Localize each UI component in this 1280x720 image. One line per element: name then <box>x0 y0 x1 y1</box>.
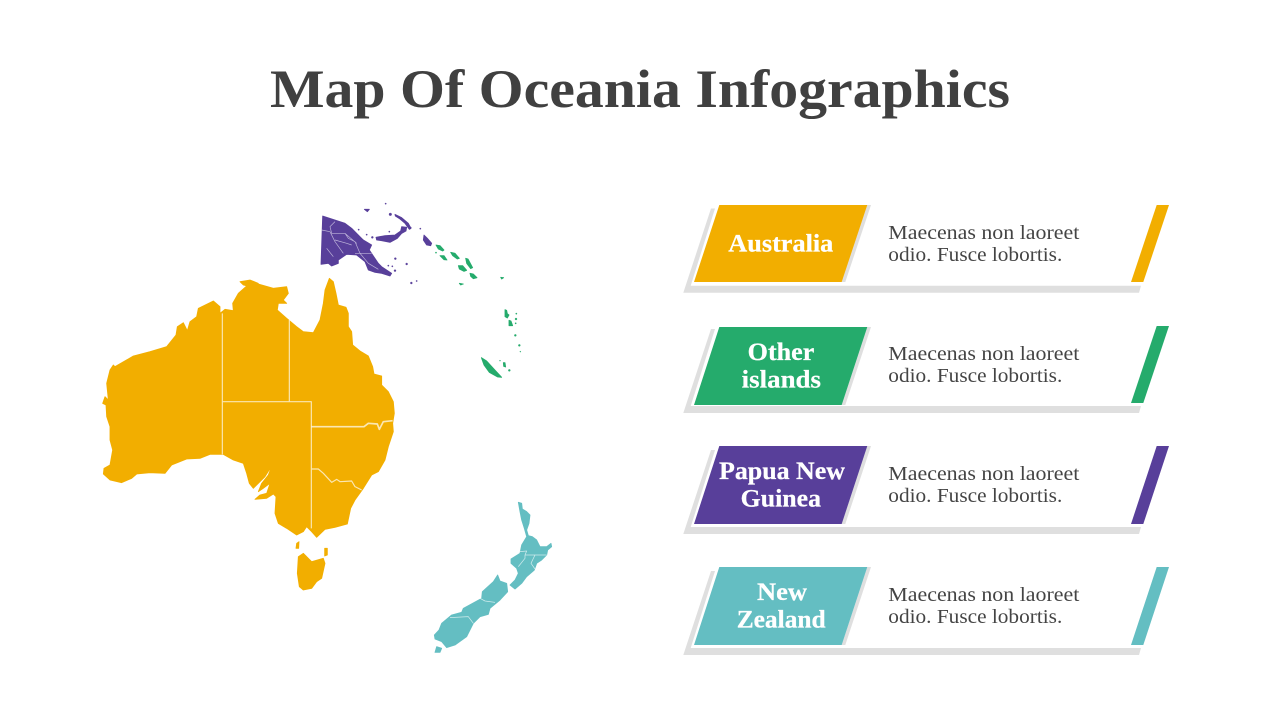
description: Maecenas non laoreet <box>888 343 1080 365</box>
label: Other islands <box>694 327 867 405</box>
label: Other islands: islands <box>742 365 821 394</box>
map region: other islands <box>435 245 521 377</box>
accent stripe <box>1131 567 1169 645</box>
description: Maecenas non laoreet <box>888 222 1080 244</box>
card backing <box>683 567 1141 655</box>
label: Papua New Guinea: Guinea <box>741 484 821 513</box>
map of Oceania <box>103 203 552 652</box>
description: Maecenas non laoreet <box>888 463 1080 485</box>
legend row: Other islands <box>683 326 1169 413</box>
accent stripe <box>1131 326 1169 403</box>
description <box>888 343 1080 387</box>
card backing <box>683 327 1141 413</box>
accent stripe <box>1131 446 1169 524</box>
label: Australia: Australia <box>728 229 834 258</box>
card backing <box>683 205 1141 293</box>
description <box>888 584 1080 628</box>
map region: New Zealand <box>434 502 552 652</box>
description: odio. Fusce lobortis. <box>888 365 1062 387</box>
label: New Zealand: Zealand <box>737 605 826 634</box>
map region: Australia <box>103 278 394 590</box>
description: odio. Fusce lobortis. <box>888 485 1062 507</box>
label: Other islands: Other <box>748 337 814 366</box>
accent stripe <box>1131 205 1169 282</box>
description: Maecenas non laoreet <box>888 584 1080 606</box>
label: New Zealand <box>694 567 867 645</box>
legend row: Papua New Guinea <box>683 446 1169 534</box>
label: New Zealand: New <box>757 577 808 606</box>
label: Australia <box>694 205 867 282</box>
legend row: New Zealand <box>683 567 1169 655</box>
description <box>888 222 1080 266</box>
label: Papua New Guinea <box>694 446 867 524</box>
label: Papua New Guinea: Papua New <box>719 456 846 485</box>
legend row: Australia <box>683 205 1169 293</box>
description <box>888 463 1080 507</box>
description: odio. Fusce lobortis. <box>888 606 1062 628</box>
card backing <box>683 446 1141 534</box>
map region: Papua New Guinea <box>321 203 432 284</box>
description: odio. Fusce lobortis. <box>888 244 1062 266</box>
title: Map Of Oceania Infographics <box>270 59 1010 119</box>
